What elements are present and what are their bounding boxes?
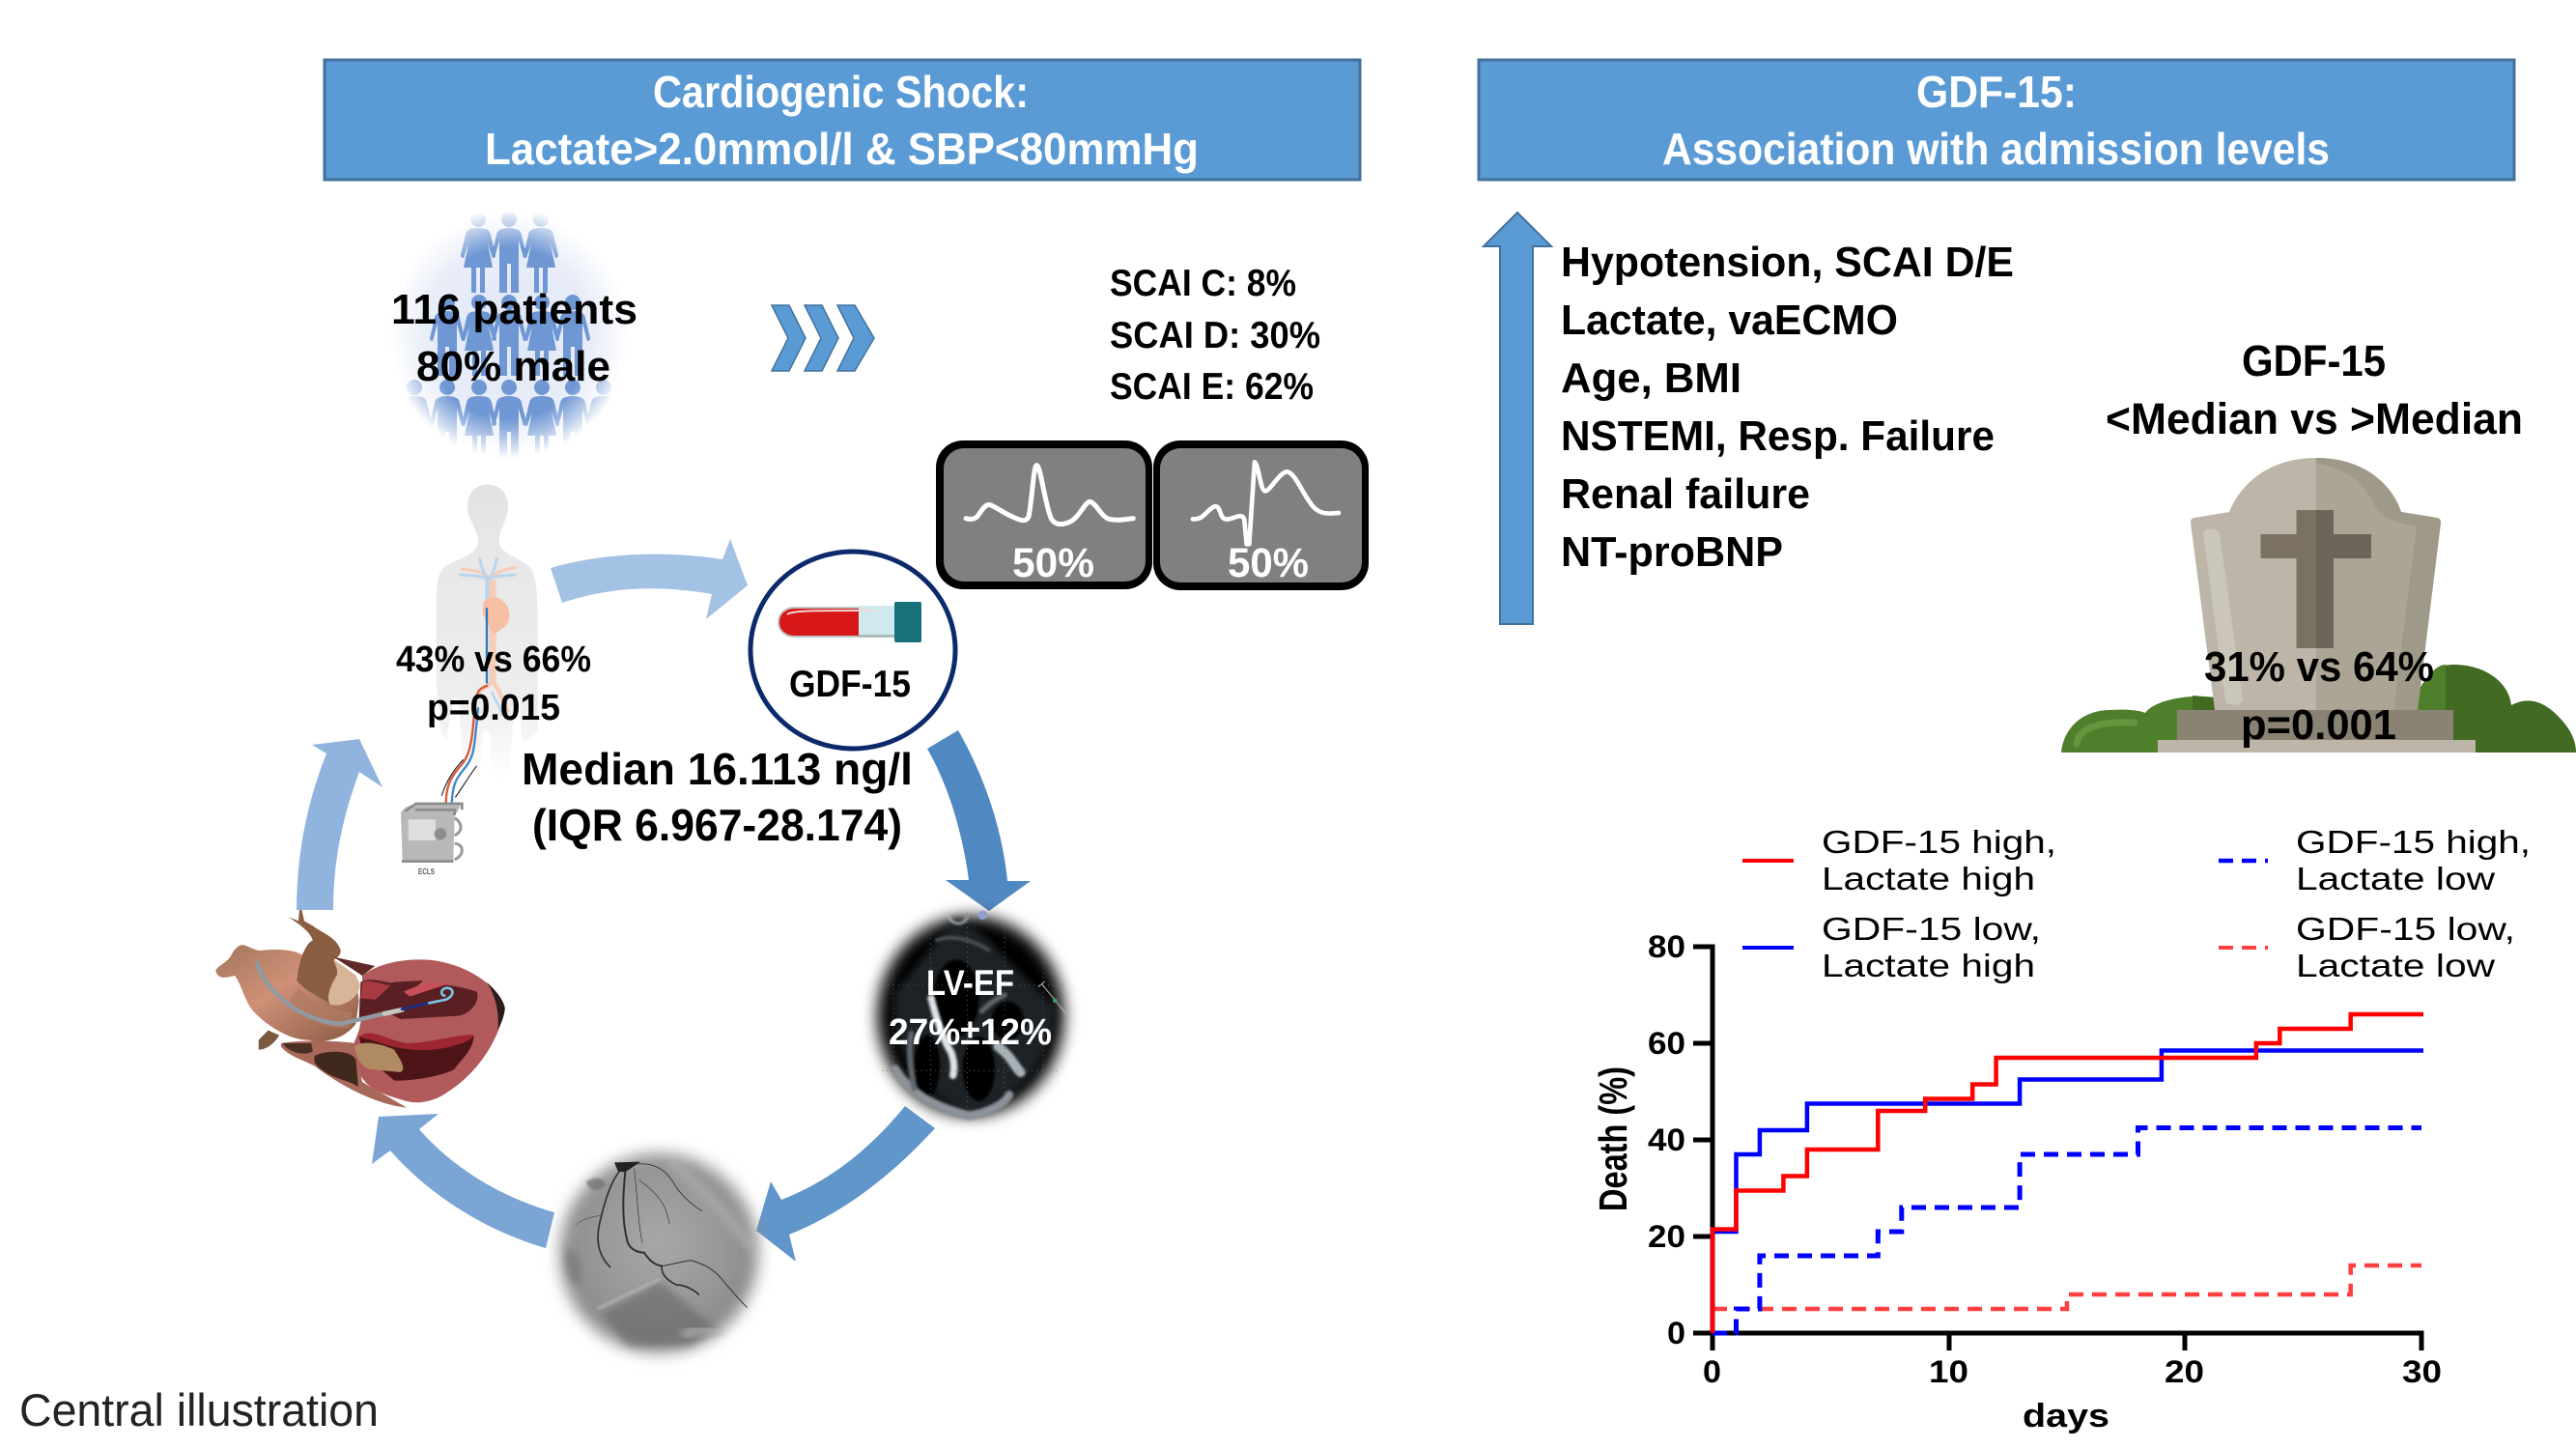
axis tick labels: 20 [2165,1354,2204,1389]
ECLS machine [401,803,462,862]
list of associated variables [1561,239,2014,576]
ECG panel: normal [936,440,1152,589]
echo image with LV-EF: LV-EF [926,963,1014,1003]
ECLS label: ECLS [418,867,436,876]
axis titles [1591,1066,2109,1435]
header: cardiogenic shock: Lactate>2.0mmol/l & SBP<80mmHg [485,124,1199,174]
axis tick labels: 0 [1703,1354,1721,1389]
patient count text: 80% male [416,343,610,390]
legend: Lactate low [2296,948,2495,983]
header: cardiogenic shock [325,60,1360,180]
icon: blood tube [778,602,921,642]
mortality comparison text: p=0.001 [2241,701,2396,749]
cross [2260,510,2316,648]
list of associated variables: NT-proBNP [1561,528,1783,576]
patient count text: 116 patients [391,286,637,333]
ECG panel: normal: 50% [1012,540,1094,586]
header: GDF-15 association: GDF-15: [1916,67,2077,117]
Impella catheter [257,963,452,1024]
Kaplan-Meier chart [1591,824,2531,1435]
ventricles [353,959,504,1102]
legend: GDF-15 low, [1822,911,2041,947]
axis tick labels: 20 [1648,1219,1685,1254]
mortality comparison text [2204,643,2434,749]
up arrow [1484,213,1551,624]
legend: Lactate high [1822,861,2035,896]
heart with Impella illustration [215,901,505,1108]
valve [354,1043,403,1072]
ECMO outcome text: 43% vs 66% [396,639,591,680]
legend: Lactate high [1822,948,2035,983]
axis tick labels: 0 [1667,1316,1685,1350]
axes [1693,947,2421,1350]
icon: test tube and GDF-15 circle [750,552,955,749]
curve: GDF-15 high, lactate low [1713,1128,2421,1333]
median GDF-15 text [522,744,913,850]
mortality comparison heading: GDF-15 [2242,336,2386,385]
vessels and heart [461,558,515,715]
legend: GDF-15 high, [1822,824,2056,860]
arrow: body to GDF-15 [551,539,748,619]
patient count text [391,286,637,390]
ECG panel: ST elevation [1153,440,1369,590]
bushes [2061,665,2576,753]
ECMO outcome text: p=0.015 [427,688,560,728]
legend [1742,824,2531,983]
list of associated variables: NSTEMI, Resp. Failure [1561,412,1995,460]
lower heart structures [281,1040,407,1108]
aorta and atrium [215,944,359,1041]
echo image with LV-EF [877,911,1070,1118]
header: GDF-15 association: Association with admission levels [1662,124,2330,174]
SCAI stage list [1110,263,1320,408]
header: cardiogenic shock: Cardiogenic Shock: [653,67,1029,117]
curve: GDF-15 low, lactate high [1713,1051,2423,1333]
median GDF-15 text: Median 16.113 ng/l [522,744,913,794]
axis tick labels: 80 [1648,929,1685,964]
arrow: echo to angiogram [756,1106,935,1262]
axis titles: days [2023,1398,2109,1435]
ECG panel: ST elevation: 50% [1228,540,1309,586]
patient population icon [402,212,616,456]
axis tick labels: 40 [1648,1122,1685,1157]
list of associated variables: Hypotension, SCAI D/E [1561,239,2014,286]
angiogram image [560,1153,758,1353]
SCAI stage list: SCAI E: 62% [1110,366,1314,408]
list of associated variables: Lactate, vaECMO [1561,297,1898,344]
axis tick labels: 30 [2402,1354,2442,1389]
legend: Lactate low [2296,861,2495,896]
legend: GDF-15 high, [2296,824,2531,860]
curve: GDF-15 low, lactate low [1713,1265,2421,1309]
mortality comparison heading [2106,336,2523,443]
caption: Central illustration [19,1384,379,1435]
echo image with LV-EF: 27%±12% [889,1012,1052,1053]
axis tick labels: 10 [1929,1354,1968,1389]
axis titles: Death (%) [1591,1066,1635,1211]
mortality comparison text: 31% vs 64% [2204,643,2434,691]
median GDF-15 text: (IQR 6.967-28.174) [532,800,902,850]
arrow: GDF-15 to echo [927,730,1031,911]
list of associated variables: Age, BMI [1561,355,1741,402]
SCAI stage list: SCAI C: 8% [1110,263,1296,304]
mortality comparison heading: <Median vs >Median [2106,394,2523,443]
icon: tombstone [2061,458,2576,753]
legend: GDF-15 low, [2296,911,2515,947]
axis tick labels [1648,929,2442,1389]
base [2177,710,2453,740]
ECMO outcome text [396,639,591,728]
curve: GDF-15 high, lactate high [1713,1014,2423,1333]
axis tick labels: 60 [1648,1026,1685,1061]
list of associated variables: Renal failure [1561,470,1810,518]
pulmonary structure [289,901,359,1006]
icon: test tube and GDF-15 circle: GDF-15 [789,664,911,705]
SCAI stage list: SCAI D: 30% [1110,315,1320,356]
stone [2191,458,2316,710]
header: GDF-15 association [1479,60,2514,180]
body silhouette [437,485,538,780]
arrow: angiogram to heart [372,1114,554,1248]
body with ECMO illustration [401,485,538,862]
chevron arrows [772,305,874,371]
arrow: heart to body [297,739,382,910]
